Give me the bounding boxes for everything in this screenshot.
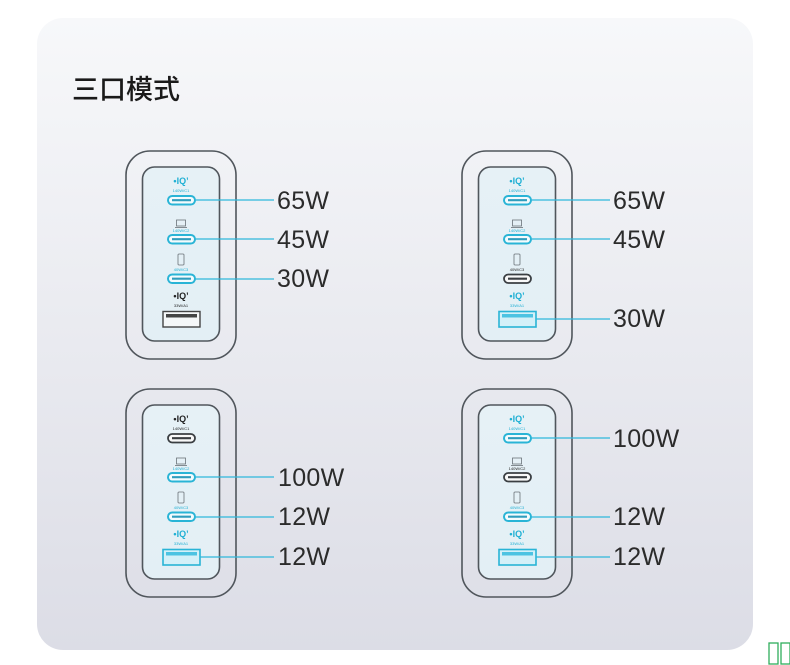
- charger: top right: 140W/C2: [509, 228, 526, 233]
- charger: top left: 33W/A1: [174, 303, 189, 308]
- charger: bottom left: 100W: [278, 464, 345, 492]
- charger: top right: 40W/C3: [510, 267, 525, 272]
- charger: bottom left: 40W/C3: [174, 505, 189, 510]
- charger: bottom left: 140W/C2: [173, 466, 190, 471]
- charger: bottom right: •IQ’: [509, 529, 525, 539]
- charger: bottom left: 33W/A1: [174, 541, 189, 546]
- charger: bottom left: •IQ’: [173, 414, 189, 424]
- charger: top right: 45W: [613, 226, 665, 254]
- charger: top right: •IQ’: [509, 291, 525, 301]
- charger: top left: 140W/C2: [173, 228, 190, 233]
- charger: top left: 140W/C1: [173, 188, 190, 193]
- charger: bottom right: 12W: [613, 543, 665, 571]
- charger: top right: 140W/C1: [509, 188, 526, 193]
- charger: bottom right: 33W/A1: [510, 541, 525, 546]
- charger: bottom left: 12W: [278, 543, 330, 571]
- charger: top left: 45W: [277, 226, 329, 254]
- charger: bottom right: 140W/C2: [509, 466, 526, 471]
- charger: top left: 40W/C3: [174, 267, 189, 272]
- charger: top left: •IQ’: [173, 176, 189, 186]
- charger: top right: •IQ’: [509, 176, 525, 186]
- charger: top right: [462, 151, 665, 359]
- charger: bottom right: 40W/C3: [510, 505, 525, 510]
- charger: top left: 30W: [277, 265, 329, 293]
- charger: top left: •IQ’: [173, 291, 189, 301]
- charger: top right: 33W/A1: [510, 303, 525, 308]
- charger: top left: [126, 151, 329, 359]
- charger: bottom right: 140W/C1: [509, 426, 526, 431]
- charger: top right: 30W: [613, 305, 665, 333]
- charger: bottom right: •IQ’: [509, 414, 525, 424]
- charger: bottom left: •IQ’: [173, 529, 189, 539]
- charger: bottom left: 12W: [278, 503, 330, 531]
- title: 三口模式: [72, 75, 180, 105]
- charger: bottom left: [126, 389, 345, 597]
- charger: bottom right: 12W: [613, 503, 665, 531]
- charger: bottom right: [462, 389, 680, 597]
- charger: bottom right: 100W: [613, 425, 680, 453]
- charger: bottom left: 140W/C1: [173, 426, 190, 431]
- charger: top right: 65W: [613, 187, 665, 215]
- corner marks: green boxes: [769, 643, 790, 664]
- charger: top left: 65W: [277, 187, 329, 215]
